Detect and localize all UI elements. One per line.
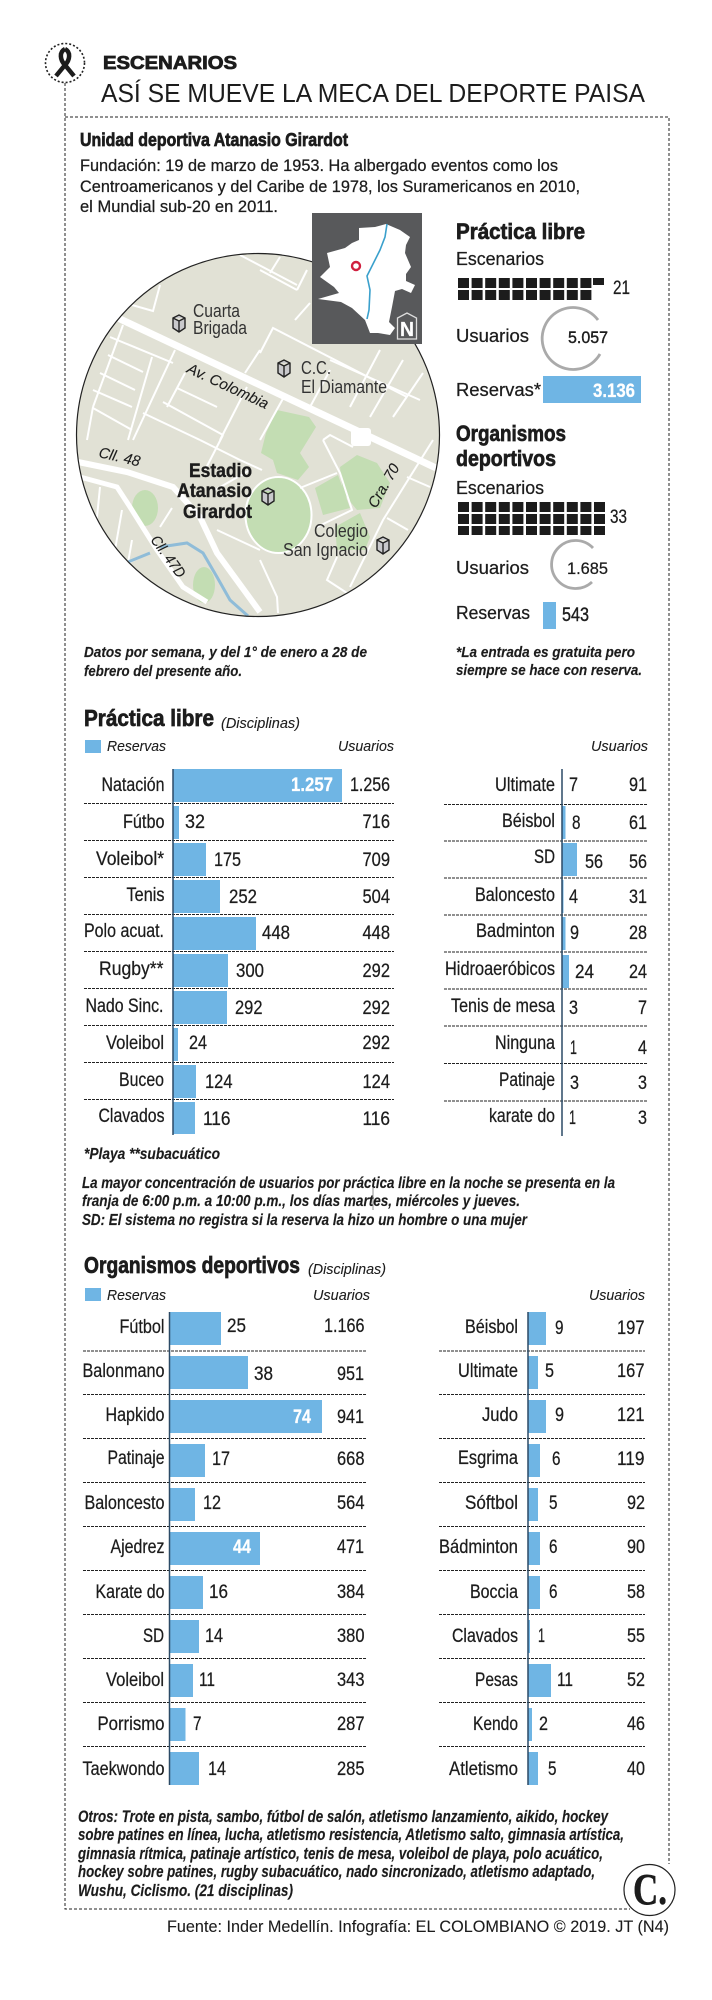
row: Hapkido: Hapkido xyxy=(106,1405,164,1426)
legend: Usuarios xyxy=(313,1287,370,1304)
row: Natación: 1.257 xyxy=(291,775,333,796)
map: green areas xyxy=(132,410,390,603)
row: Hidroaeróbicos: Hidroaeróbicos xyxy=(445,959,555,980)
row: Fútbol xyxy=(83,1312,367,1351)
row: Ninguna: 1 xyxy=(570,1038,577,1059)
row: Buceo: 124 xyxy=(205,1072,233,1093)
heading: kicker: ESCENARIOS xyxy=(103,53,237,73)
panel: organismos totals: Usuarios xyxy=(456,558,529,578)
text block: intro: el Mundial sub-20 en 2011. xyxy=(80,198,278,216)
row: Sóftbol: 92 xyxy=(627,1493,645,1514)
row: Ninguna: Ninguna xyxy=(495,1033,555,1054)
note: otros disciplinas: hockey sobre patines, rugby subacuático, nado sincronizado, atletismo adaptado, xyxy=(78,1863,595,1881)
row: Balonmano: 951 xyxy=(337,1364,364,1385)
row: Nado sincronizado: 292 xyxy=(235,998,262,1019)
panel: práctica libre totals xyxy=(456,219,641,403)
map: street grid xyxy=(78,255,436,613)
row: Clavados: 55 xyxy=(627,1626,645,1647)
row: Boccia: Boccia xyxy=(470,1582,518,1603)
panel: organismos totals: Escenarios xyxy=(456,478,544,498)
row: Polo acuático xyxy=(84,917,394,952)
panel: organismos totals: 1.685 xyxy=(567,559,608,578)
row: Bádminton xyxy=(439,1532,645,1570)
note: user concentration: SD: El sistema no registra si la reserva la hizo un hombre o una mujer xyxy=(82,1212,528,1229)
panel: organismos totals: Reservas xyxy=(456,603,530,623)
panel: organismos totals: 543 xyxy=(562,605,589,626)
row: Kendo: 2 xyxy=(539,1714,548,1735)
row: karate do: 3 xyxy=(638,1108,647,1129)
row: Tenis: Tenis xyxy=(126,885,164,906)
bar chart: práctica libre right xyxy=(444,769,647,1136)
icon: north arrow: N xyxy=(400,319,414,341)
row: Badminton xyxy=(444,917,647,952)
row: Béisbol: Béisbol xyxy=(465,1317,518,1338)
row: Tenis: 504 xyxy=(362,887,390,908)
row: Esgrima: Esgrima xyxy=(458,1448,518,1469)
row: Hidroaeróbicos: 24 xyxy=(629,962,647,983)
chart: usuarios ring xyxy=(552,541,593,589)
row: karate do xyxy=(489,1106,647,1129)
row: SD: 380 xyxy=(337,1626,364,1647)
row: Fútbol: Fútbol xyxy=(120,1317,164,1338)
row: SD: SD xyxy=(534,847,555,868)
row: Patinaje: Patinaje xyxy=(499,1070,555,1091)
row: Baloncesto: Baloncesto xyxy=(84,1493,164,1514)
panel: práctica libre totals: Reservas* xyxy=(456,380,541,400)
row: Judo: 9 xyxy=(555,1405,564,1426)
row: Kendo: Kendo xyxy=(473,1714,518,1735)
row: SD: 56 xyxy=(585,852,603,873)
row: Buceo xyxy=(84,1065,394,1100)
row: Rugby: 300 xyxy=(236,961,264,982)
map: Atanasio Girardot area xyxy=(76,254,440,616)
row: Rugby xyxy=(84,954,394,988)
row: Taekwondo xyxy=(82,1752,364,1785)
row: Kendo xyxy=(439,1708,645,1746)
row: Porrismo: 287 xyxy=(337,1714,364,1735)
heading: práctica libre disciplinas: (Disciplinas) xyxy=(221,715,300,732)
map: river xyxy=(128,543,248,616)
row: Voleibol playa: Voleibol* xyxy=(96,849,165,870)
row: Porrismo: Porrismo xyxy=(98,1714,164,1735)
row: Hapkido: 74 xyxy=(293,1407,311,1428)
row: SD xyxy=(444,843,647,878)
row: Karate do xyxy=(83,1576,367,1614)
row: Voleibol: 292 xyxy=(362,1033,390,1054)
row: Fútbol: 1.166 xyxy=(324,1316,364,1337)
row: Pesas: 52 xyxy=(627,1670,645,1691)
row: Ultimate: 91 xyxy=(629,775,647,796)
row: Voleibol playa xyxy=(84,843,394,878)
row: Balonmano xyxy=(82,1356,367,1394)
row: Natación xyxy=(84,769,394,804)
row: Baloncesto: 564 xyxy=(337,1493,365,1514)
row: Taekwondo: Taekwondo xyxy=(82,1759,164,1780)
row: Taekwondo: 285 xyxy=(337,1759,364,1780)
row: Tenis de mesa: Tenis de mesa xyxy=(451,996,555,1017)
row: Patinaje: 17 xyxy=(212,1449,230,1470)
row: Atletismo: 5 xyxy=(548,1759,556,1780)
row: SD: 56 xyxy=(629,852,647,873)
note: user concentration: La mayor concentración de usuarios por práctica libre en la noche se presenta en la xyxy=(82,1175,615,1192)
row: Karate do: Karate do xyxy=(96,1582,164,1603)
map labels: C.C. xyxy=(301,358,331,378)
row: karate do: 1 xyxy=(569,1108,576,1129)
note: playa subacuático: *Playa **subacuático xyxy=(84,1146,220,1163)
row: Voleibol: 24 xyxy=(189,1033,207,1054)
row: Boccia: 58 xyxy=(627,1582,645,1603)
pictogram: 21 escenarios xyxy=(458,278,604,300)
panel: organismos totals: 33 xyxy=(610,507,627,528)
text block: intro xyxy=(80,157,580,216)
note: free entry: *La entrada es gratuita pero xyxy=(456,644,635,661)
bar: reservas xyxy=(543,602,556,629)
row: Clavados xyxy=(98,1102,390,1134)
heading: organismos deportivos disciplinas: Organismos deportivos xyxy=(84,1252,300,1278)
map labels: San Ignacio xyxy=(283,540,368,560)
map labels: Cll. 48 xyxy=(97,444,142,470)
text block: intro: Fundación: 19 de marzo de 1953. Ha albergado eventos como los xyxy=(80,157,558,175)
row: Béisbol xyxy=(444,806,647,841)
row: karate do: karate do xyxy=(489,1106,555,1127)
row: Polo acuático: Polo acuat. xyxy=(84,921,164,942)
row: Clavados: 1 xyxy=(538,1626,545,1647)
row: Voleibol xyxy=(83,1664,367,1702)
map labels: Cuarta xyxy=(193,301,241,321)
row: Tenis xyxy=(84,880,394,914)
row: Esgrima xyxy=(439,1444,645,1482)
legend: Usuarios xyxy=(591,738,648,755)
row: Balonmano: 38 xyxy=(254,1364,273,1385)
row: Esgrima: 119 xyxy=(617,1449,644,1470)
title: ASÍ SE MUEVE LA MECA DEL DEPORTE PAISA xyxy=(101,79,645,108)
row: Ninguna: 4 xyxy=(638,1038,647,1059)
pictogram: 33 escenarios xyxy=(458,502,605,535)
row: Rugby: Rugby** xyxy=(99,959,164,980)
row: Ajedrez: Ajedrez xyxy=(110,1537,164,1558)
panel: organismos totals: Organismos xyxy=(456,421,566,446)
row: Polo acuático: 448 xyxy=(262,923,290,944)
row: Nado sincronizado xyxy=(84,991,394,1026)
heading: organismos deportivos disciplinas: (Disciplinas) xyxy=(308,1261,386,1278)
map labels xyxy=(97,301,404,581)
row: Baloncesto: 12 xyxy=(203,1493,221,1514)
row: Patinaje: 668 xyxy=(337,1449,364,1470)
row: Boccia xyxy=(439,1576,645,1614)
bar chart: práctica libre left xyxy=(84,769,394,1135)
row: Natación: 1.256 xyxy=(350,775,390,796)
row: Fútbol: 25 xyxy=(227,1316,246,1337)
note: user concentration xyxy=(82,1175,615,1229)
row: Sóftbol xyxy=(439,1488,645,1526)
panel: organismos totals: deportivos xyxy=(456,446,556,471)
row: Patinaje: 3 xyxy=(638,1073,647,1094)
note: data period: Datos por semana, y del 1° de enero a 28 de xyxy=(84,644,367,661)
panel: práctica libre totals: 3.136 xyxy=(593,381,635,402)
row: Ajedrez xyxy=(83,1532,367,1570)
icon: building El Diamante xyxy=(278,360,290,377)
panel: organismos totals xyxy=(456,421,627,629)
row: Ultimate xyxy=(439,1356,645,1394)
row: Voleibol playa: 175 xyxy=(214,850,241,871)
row: Baloncesto: Baloncesto xyxy=(475,885,555,906)
note: otros disciplinas: Wushu, Ciclismo. (21 disciplinas) xyxy=(78,1882,293,1900)
row: Clavados: 116 xyxy=(203,1109,230,1130)
row: Bádminton: 6 xyxy=(549,1537,558,1558)
row: Bádminton: Bádminton xyxy=(439,1537,518,1558)
row: Ajedrez: 471 xyxy=(337,1537,364,1558)
legend: Reservas xyxy=(107,738,166,755)
row: Tenis de mesa xyxy=(444,996,647,1026)
row: Judo: 121 xyxy=(617,1405,644,1426)
row: Voleibol xyxy=(84,1028,394,1062)
note: otros disciplinas: gimnasia rítmica, patinaje artístico, tenis de mesa, voleibol de playa, polo acuático, xyxy=(77,1845,603,1863)
bar chart: organismos right xyxy=(439,1312,645,1785)
row: SD: 14 xyxy=(205,1626,223,1647)
row: Porrismo xyxy=(83,1708,367,1746)
row: Pesas xyxy=(439,1664,645,1702)
row: Béisbol: 9 xyxy=(555,1318,564,1339)
note: data period xyxy=(84,644,367,680)
note: free entry: siempre se hace con reserva. xyxy=(456,662,642,679)
row: Baloncesto xyxy=(444,880,647,915)
row: Tenis: 252 xyxy=(229,887,257,908)
row: Baloncesto xyxy=(83,1488,367,1526)
row: Ultimate: Ultimate xyxy=(458,1361,518,1382)
map labels: Av. Colombia xyxy=(183,360,271,413)
row: SD xyxy=(83,1620,367,1658)
map labels: Cra. 70 xyxy=(365,460,404,511)
row: Judo xyxy=(439,1400,645,1438)
row: Ultimate: 7 xyxy=(569,775,578,796)
legend: Usuarios xyxy=(589,1287,645,1304)
row: Voleibol playa: 709 xyxy=(362,850,390,871)
panel: práctica libre totals: Práctica libre xyxy=(456,219,585,244)
row: Badminton: 9 xyxy=(570,923,579,944)
row: Ninguna xyxy=(444,1033,647,1064)
row: Patinaje xyxy=(83,1444,367,1482)
row: Patinaje: 3 xyxy=(570,1073,579,1094)
row: SD: SD xyxy=(143,1626,164,1647)
row: Voleibol: Voleibol xyxy=(106,1670,164,1691)
row: Fútbol: Fútbo xyxy=(123,812,164,833)
row: Voleibol: 343 xyxy=(337,1670,364,1691)
row: Clavados: 116 xyxy=(362,1109,390,1130)
row: Karate do: 16 xyxy=(209,1582,228,1603)
heading: práctica libre disciplinas xyxy=(84,705,300,732)
map labels: Estadio xyxy=(189,461,252,482)
row: Badminton: 28 xyxy=(629,923,647,944)
row: Buceo: 124 xyxy=(362,1072,390,1093)
row: Tenis de mesa: 7 xyxy=(638,998,647,1019)
row: Buceo: Buceo xyxy=(119,1070,164,1091)
row: Béisbol: 61 xyxy=(629,813,647,834)
panel: práctica libre totals: Usuarios xyxy=(456,326,529,346)
row: Pesas: Pesas xyxy=(475,1670,518,1691)
row: Atletismo xyxy=(449,1752,645,1785)
row: Sóftbol: Sóftbol xyxy=(465,1493,518,1514)
row: Clavados xyxy=(439,1620,645,1658)
row: Clavados: Clavados xyxy=(452,1626,518,1647)
row: Voleibol: Voleibol xyxy=(106,1033,164,1054)
map labels: Colegio xyxy=(314,521,368,541)
row: Hapkido xyxy=(83,1400,367,1438)
map inset: Medellín locator xyxy=(312,213,422,344)
row: Hidroaeróbicos: 24 xyxy=(575,962,594,983)
row: Taekwondo: 14 xyxy=(208,1759,226,1780)
logo: El Colombiano: C. xyxy=(633,1865,667,1914)
row: Béisbol: 197 xyxy=(617,1318,644,1339)
row: Porrismo: 7 xyxy=(193,1714,202,1735)
icon: building Colegio xyxy=(377,537,389,554)
row: Rugby: 292 xyxy=(362,961,390,982)
bar: reservas xyxy=(543,376,641,403)
row: Baloncesto: 4 xyxy=(569,887,578,908)
row: Béisbol: 8 xyxy=(572,813,580,834)
legend: Reservas xyxy=(107,1287,166,1304)
row: Atletismo: 40 xyxy=(627,1759,645,1780)
row: Nado sincronizado: Nado Sinc. xyxy=(86,996,164,1017)
map labels: Brigada xyxy=(193,318,248,338)
row: Ultimate: 5 xyxy=(545,1361,554,1382)
legend xyxy=(85,1287,645,1304)
panel: práctica libre totals: Escenarios xyxy=(456,249,544,269)
note: free entry xyxy=(456,644,642,679)
text block: intro: Centroamericanos y del Caribe de 1978, los Suramericanos en 2010, xyxy=(80,178,580,196)
row: Fútbol xyxy=(84,806,394,840)
row: Nado sincronizado: 292 xyxy=(362,998,390,1019)
chart: usuarios ring xyxy=(542,308,600,370)
row: Atletismo: Atletismo xyxy=(449,1759,518,1780)
heading: práctica libre disciplinas: Práctica libre xyxy=(84,705,214,731)
icon: building Cuarta Brigada xyxy=(173,315,185,332)
row: Bádminton: 90 xyxy=(627,1537,645,1558)
panel: práctica libre totals: 21 xyxy=(613,278,630,299)
row: Béisbol: Béisbol xyxy=(502,811,555,832)
source credit: Fuente: Inder Medellín. Infografía: EL COLOMBIANO © 2019. JT (N4) xyxy=(167,1918,669,1936)
icon: building Estadio xyxy=(262,488,274,505)
note: data period: febrero del presente año. xyxy=(84,663,242,680)
row: Pesas: 11 xyxy=(557,1670,573,1691)
row: Polo acuático: 448 xyxy=(362,923,390,944)
row: Fútbol: 32 xyxy=(185,812,205,833)
legend xyxy=(85,738,648,755)
row: Balonmano: Balonmano xyxy=(82,1361,164,1382)
row: Voleibol: 11 xyxy=(199,1670,215,1691)
row: Hapkido: 941 xyxy=(337,1407,364,1428)
row: Judo: Judo xyxy=(482,1405,518,1426)
row: Ultimate: 167 xyxy=(617,1361,644,1382)
row: Fútbol: 716 xyxy=(362,812,390,833)
panel: dashed frame xyxy=(65,83,669,1909)
row: Ajedrez: 44 xyxy=(233,1537,251,1558)
icon: mourning ribbon xyxy=(46,44,84,82)
map labels: Cll. 47D xyxy=(147,532,189,581)
row: Hidroaeróbicos xyxy=(444,955,647,989)
subheading: unidad deportiva: Unidad deportiva Atanasio Girardot xyxy=(80,130,348,150)
note: user concentration: franja de 6:00 p.m. a 10:00 p.m., los días martes, miércoles y jueves. xyxy=(82,1193,520,1210)
row: Karate do: 384 xyxy=(337,1582,365,1603)
row: Esgrima: 6 xyxy=(552,1449,560,1470)
row: Kendo: 46 xyxy=(627,1714,645,1735)
map labels: Atanasio xyxy=(177,481,252,502)
row: Patinaje: Patinaje xyxy=(108,1448,164,1469)
row: Baloncesto: 31 xyxy=(629,887,647,908)
note: otros disciplinas xyxy=(77,1808,624,1900)
row: Tenis de mesa: 3 xyxy=(569,998,578,1019)
row: Sóftbol: 5 xyxy=(549,1493,558,1514)
legend: Usuarios xyxy=(338,738,394,755)
row: Patinaje xyxy=(444,1070,647,1101)
row: Natación: Natación xyxy=(102,775,164,796)
map labels: El Diamante xyxy=(301,377,387,397)
bar chart: organismos left xyxy=(82,1312,367,1785)
row: Ultimate xyxy=(444,775,647,804)
row: Badminton: Badminton xyxy=(476,921,555,942)
panel: práctica libre totals: 5.057 xyxy=(568,328,608,347)
row: Clavados: Clavados xyxy=(98,1106,164,1127)
row: Boccia: 6 xyxy=(549,1582,558,1603)
row: Béisbol xyxy=(439,1312,645,1351)
map labels: Girardot xyxy=(183,502,253,523)
row: Ultimate: Ultimate xyxy=(495,775,555,796)
